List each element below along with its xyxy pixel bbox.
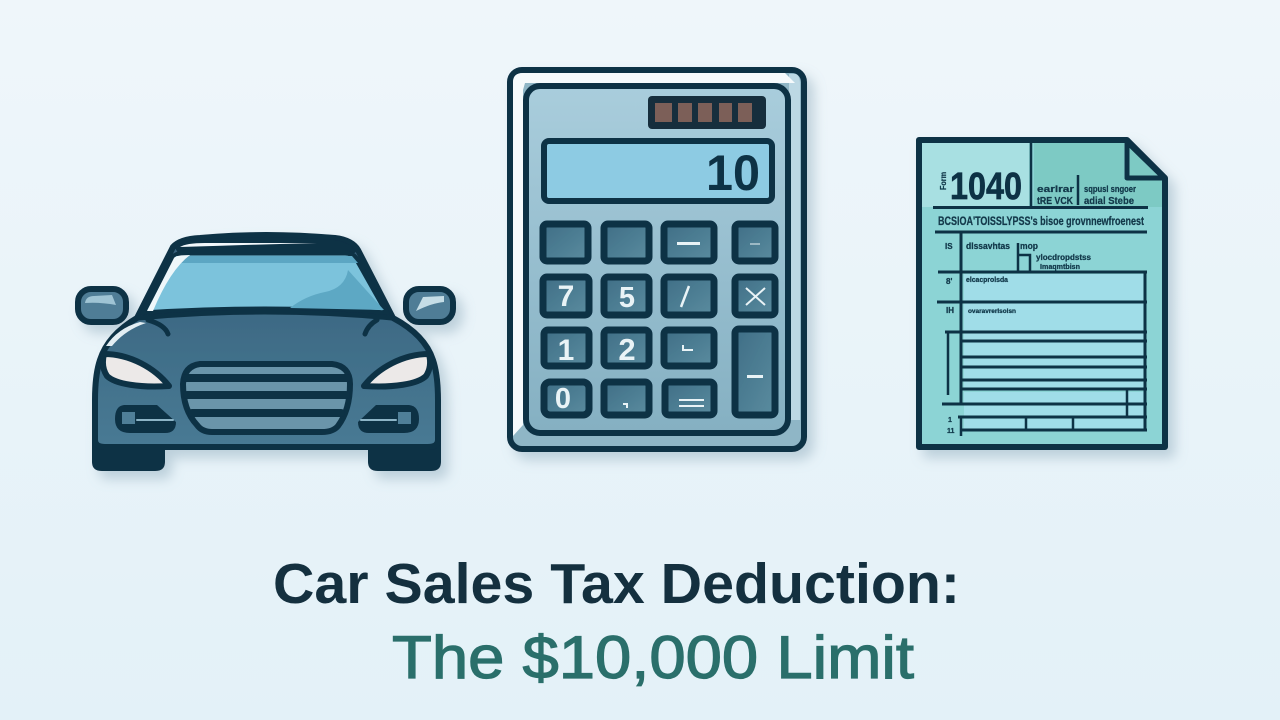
header small print: 11 <box>947 428 955 435</box>
header small print: BCSIOA'TOISSLYPSS's bisoe grovnnewfroenest <box>938 214 1144 228</box>
key labels: 0 <box>555 383 571 415</box>
header small print: mop <box>1020 241 1038 251</box>
icon: car front view <box>78 235 453 471</box>
display <box>544 141 772 201</box>
header small print: tRE VCK <box>1037 196 1074 207</box>
title line 1: Car Sales Tax Deduction: <box>273 552 960 616</box>
calculator case <box>510 70 804 449</box>
header small print: IS <box>945 242 953 251</box>
calculator face <box>526 86 788 433</box>
header small print: Imaqmtbisn <box>1040 264 1080 271</box>
car roof <box>175 238 356 256</box>
header small print: ovaravrerlsolsn <box>968 309 1016 315</box>
key labels: 7 <box>558 280 574 313</box>
header small print: ylocdropdstss <box>1036 253 1092 262</box>
headlights <box>103 354 430 387</box>
car wheels <box>92 430 441 471</box>
header small print: Form <box>939 172 948 190</box>
title <box>273 552 960 691</box>
header small print: elcacprolsda <box>966 277 1008 284</box>
folded corner <box>1127 142 1164 178</box>
fog lights <box>115 405 419 433</box>
grille <box>183 364 350 432</box>
header small print: adial Stebe <box>1084 196 1134 207</box>
header small print <box>938 172 1144 435</box>
key labels: 2 <box>618 332 636 367</box>
car mirrors <box>78 289 453 322</box>
display: 10 <box>706 145 760 201</box>
body highlight <box>106 322 146 346</box>
header small print: earlrar <box>1037 184 1075 194</box>
form number: 1040 <box>950 166 1022 208</box>
header small print: sqpusl sngoer <box>1084 184 1136 194</box>
key labels: 5 <box>619 282 635 314</box>
header small print: 1 <box>948 417 952 424</box>
windshield <box>143 253 387 313</box>
header small print: dlssavhtas <box>966 241 1010 251</box>
form rule lines <box>933 140 1148 436</box>
solar panel <box>648 96 766 129</box>
form sheet <box>919 140 1165 447</box>
form panels <box>922 143 1162 430</box>
header small print: IH <box>946 306 954 315</box>
hood line <box>138 312 392 334</box>
key labels: 1 <box>558 334 574 367</box>
keypad <box>543 224 775 415</box>
car body <box>95 235 438 447</box>
key labels <box>555 242 765 415</box>
car roof highlight <box>180 243 317 247</box>
header small print: 8' <box>946 277 952 286</box>
icon: calculator <box>510 70 804 449</box>
icon: form 1040 tax document <box>919 140 1165 447</box>
title line 2: The $10,000 Limit <box>392 624 914 691</box>
